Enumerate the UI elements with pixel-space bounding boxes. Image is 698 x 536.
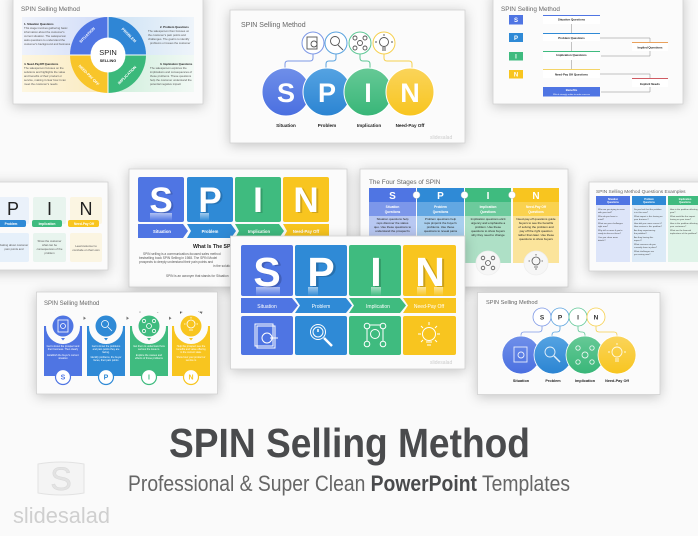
large icon circles <box>502 336 636 374</box>
letters S P I N: P <box>318 78 336 108</box>
slide: SPIN wheel, top left <box>13 0 203 104</box>
chevron labels: Problem <box>312 304 330 310</box>
labels: Need-Pay Off <box>605 379 630 383</box>
card text: Establish the buyer's current <box>47 354 79 357</box>
quadrant text: problems or issues the customer <box>150 41 190 45</box>
tile letters: I <box>253 181 263 220</box>
column text: currently have in place? <box>634 246 658 249</box>
column text: the problem? <box>634 232 648 235</box>
tile letter reflections <box>256 287 443 296</box>
slide heading: SPIN Selling Method Questions Examples <box>596 189 686 195</box>
column text: impact? <box>634 239 642 242</box>
column bodies <box>596 205 698 262</box>
column text: questions to show buyers <box>471 229 505 233</box>
column text: implications of the problem? <box>670 232 698 235</box>
card text: facing. <box>102 351 110 354</box>
SPIN wheel: SPIN <box>99 48 117 57</box>
column text: buyers to see the benefits <box>519 221 554 225</box>
card text: service is <box>186 359 197 362</box>
slide: question flow, top right <box>493 0 683 104</box>
column subheaders: Need-Pay Off <box>526 205 547 209</box>
question boxes <box>543 15 600 96</box>
column labels: Need-Pay Off <box>74 222 95 226</box>
column labels: Situation <box>55 311 71 315</box>
quadrant text: service, making it clear how it can <box>24 78 66 82</box>
quadrant text: those problems. These questions <box>150 74 192 78</box>
column text: Lead customer to <box>75 244 97 248</box>
quadrant text: current situation. The salesperson <box>24 34 67 38</box>
tile letter shadows: S <box>151 182 175 221</box>
column text: Why tell us more if you're <box>598 229 623 232</box>
column text: your business? <box>634 218 649 221</box>
column bodies <box>369 216 559 263</box>
SPIN wheel: PROBLEM <box>121 27 137 43</box>
badge letters: N <box>188 374 194 382</box>
column headers: Situation <box>608 198 619 201</box>
column text: Who do you have in <box>598 216 618 218</box>
column headers: Questions <box>643 201 656 204</box>
quadrant text: The salesperson explores the <box>150 66 187 70</box>
column text: conclude on their own <box>72 248 100 252</box>
slide: letter cards, far left <box>0 182 108 270</box>
letter badges <box>56 370 198 384</box>
card text: situation <box>58 357 68 360</box>
column text: How serious is this problem? <box>634 225 663 228</box>
question boxes: Need-Pay Off Questions <box>555 72 588 76</box>
chevron arrows: Situation <box>153 229 171 234</box>
letters S P I N: S <box>277 78 295 108</box>
tile letter shadows: P <box>310 250 337 296</box>
column text: what can be <box>42 243 57 247</box>
chevron arrows: Implication <box>248 229 270 234</box>
tile letters: I <box>370 249 382 295</box>
logo wordmark: slidesalad <box>13 503 110 528</box>
column text: with your tool? <box>598 211 613 214</box>
column headers: N <box>532 191 540 202</box>
column headers: Questions <box>607 201 620 204</box>
letters: P <box>558 314 563 322</box>
question boxes: Problem Questions <box>558 36 585 40</box>
letter tiles <box>241 245 456 296</box>
slide heading: The Four Stages of SPIN <box>369 179 441 186</box>
letters: I <box>577 314 579 322</box>
SPIN wheel: IMPLICATION <box>117 65 138 85</box>
column text: mind? <box>598 219 605 221</box>
column text <box>374 217 556 241</box>
card text: and pain points they are <box>93 348 120 351</box>
body text: bestselling book SPIN Selling in 1988. The SPIN Model <box>139 256 217 260</box>
quadrant text <box>24 22 193 86</box>
icon tiles <box>241 316 456 355</box>
slide heading: SPIN Selling Method <box>21 6 80 13</box>
tile letter shadows: S <box>256 250 283 296</box>
body heading: What Is The SPIN <box>193 244 236 250</box>
tile letter shadows: N <box>417 250 447 296</box>
column text <box>0 239 100 255</box>
column text: reps pinpoint the buyer's <box>424 221 457 225</box>
tile letter shadows: I <box>372 250 384 296</box>
column labels: Implication <box>39 222 55 226</box>
letter tiles: N <box>514 72 518 78</box>
body text: in the solution <box>213 264 233 268</box>
side boxes: Explicit Needs <box>640 82 660 86</box>
column text: right now? <box>598 225 609 228</box>
column text: What challenges are <box>634 250 655 253</box>
column subheaders: Questions <box>433 210 449 214</box>
column letters: I <box>47 199 52 219</box>
column labels: Need-Pay Off <box>180 311 203 315</box>
labels <box>513 379 630 383</box>
column tints <box>0 197 102 262</box>
column headers: P <box>437 191 444 202</box>
body text: prospects to deeply understand their pain points and <box>139 260 213 264</box>
column text: details? <box>598 239 606 242</box>
column text: of solving the problem and <box>518 225 554 229</box>
chevron arrows <box>138 224 329 238</box>
labels: Need-Pay Off <box>396 123 425 128</box>
logo mark: S <box>50 461 72 497</box>
slide heading: SPIN Selling Method <box>241 22 306 29</box>
column text: problem <box>44 251 55 255</box>
column letters <box>7 199 92 219</box>
column subheaders: Problem <box>434 205 447 209</box>
icon glyphs <box>307 34 393 50</box>
labels <box>276 123 425 128</box>
column subheaders: Implication <box>480 205 496 209</box>
column text: questions to reveal pains <box>424 229 458 233</box>
connectors <box>285 54 412 69</box>
chevron arrows: Need-Pay Off <box>293 229 320 234</box>
column text: What are the financial <box>670 229 692 232</box>
column headers: S <box>389 191 396 202</box>
letter circles <box>533 308 605 326</box>
column text: Asking about customer <box>0 243 28 247</box>
card text: Get to know the problems <box>92 345 121 348</box>
quadrant text: meet the customer's needs <box>24 82 58 86</box>
slide heading: SPIN Selling Method <box>486 300 538 306</box>
chevron labels: Situation <box>257 304 277 310</box>
column headers <box>369 188 559 202</box>
icon: light bulb <box>418 322 440 345</box>
letters: S <box>540 314 545 322</box>
column letters: P <box>7 199 19 219</box>
column subheaders <box>369 202 559 216</box>
column text: What would be the impact <box>670 215 696 218</box>
body text: SPIN selling is a communication-focused sales method <box>143 252 221 256</box>
column text: reps discover the status <box>377 221 409 225</box>
body text: SPIN is an acronym that stands for Situation <box>166 274 229 278</box>
quadrant text: The salesperson then focuses on <box>148 29 190 33</box>
badge letters: I <box>148 374 150 382</box>
column labels <box>55 311 203 315</box>
tile letters: S <box>149 181 173 220</box>
card bodies <box>44 326 210 376</box>
icon glyphs <box>481 254 543 270</box>
card text: serious the issue is. <box>138 348 160 351</box>
column text: you seeing now? <box>634 254 651 256</box>
quadrant text: information about the customer's <box>24 30 65 34</box>
column text: your customers? <box>670 225 687 228</box>
tile letter shadows: N <box>295 182 321 221</box>
icon circles <box>52 316 202 336</box>
column text: consequences of the <box>37 247 63 251</box>
column text: How did you come across it? <box>634 222 663 225</box>
tile letter shadows: P <box>200 182 224 221</box>
quadrant text: challenges. The goal is to identify <box>148 37 190 41</box>
column text: What concerns do you <box>634 243 657 246</box>
column text: problems. Use these <box>427 225 455 229</box>
icon: magnifier <box>310 324 332 346</box>
letters S P I N <box>277 78 420 108</box>
letters S P I N: N <box>400 78 420 108</box>
tile letters: N <box>293 181 319 220</box>
column text: questions to show buyers <box>519 237 553 241</box>
column text: Are they having this <box>634 236 654 239</box>
chevron labels <box>241 298 456 313</box>
column headers: Implication <box>679 198 692 201</box>
SPIN wheel: SELLING <box>100 59 116 63</box>
SPIN wheel: SITUATION <box>79 27 96 44</box>
brand mark: slidesalad <box>430 360 452 366</box>
slide: SPIN circles with icons, bottom right <box>478 292 660 394</box>
card text: Get to know the prospect and <box>47 345 80 348</box>
letter tiles <box>509 15 523 78</box>
tile letter shadows <box>151 182 321 221</box>
tile letters: N <box>415 249 445 295</box>
tile letter reflections <box>150 213 209 221</box>
arrow connectors <box>413 192 516 198</box>
letters S P I N: I <box>364 78 372 108</box>
quadrant text: asks questions to understand the <box>24 38 65 42</box>
quadrant text: the customer's pain points and <box>148 33 186 37</box>
labels: Problem <box>318 123 336 128</box>
column text <box>598 208 698 256</box>
slide: SPIN circles, top center <box>230 10 465 143</box>
icon: process gears <box>364 323 386 347</box>
column headers: Problem <box>644 198 654 201</box>
column subheaders: Questions <box>385 210 401 214</box>
labels: Situation <box>513 379 530 383</box>
column headers: Questions <box>679 201 692 204</box>
slide heading: SPIN Selling Method <box>501 6 560 13</box>
column labels: Implication <box>140 311 158 315</box>
column text: Situation questions help <box>377 217 409 221</box>
card text: faces, their pain points <box>93 359 119 362</box>
card text <box>47 345 206 362</box>
quadrant text: 3. Implication Questions <box>160 62 193 66</box>
column text: pay off the right question <box>520 229 553 233</box>
letter tiles: I <box>515 54 517 60</box>
connectors <box>521 326 617 337</box>
column text: having on your team? <box>670 218 692 221</box>
icon glyphs <box>58 317 198 333</box>
column subheaders: Situation <box>386 205 399 209</box>
pointer triangles <box>61 338 193 340</box>
quadrant text: 1. Situation Questions <box>24 22 54 26</box>
column text: What impact is this having on <box>634 215 663 218</box>
slide: SPIN hero tiles, center <box>230 236 465 369</box>
card text: Identify problems, the buyer <box>91 356 122 359</box>
column text: pain points and <box>5 247 24 251</box>
column text: is in this area? <box>634 211 649 214</box>
labels: Problem <box>545 379 561 383</box>
column text: problem. Use these <box>475 225 501 229</box>
quadrant text: solutions and highlights the value <box>24 70 66 74</box>
tile letters <box>149 181 319 220</box>
column text: What are your challenges <box>598 222 624 225</box>
column headers <box>596 196 698 205</box>
tile letters <box>253 249 445 295</box>
slide: four cards, bottom left <box>36 292 218 394</box>
quadrant text: implications and consequences of <box>150 70 192 74</box>
SPIN wheel: NEED-PAY OFF <box>78 64 100 87</box>
card text: in the current state. <box>180 351 202 354</box>
column labels: Problem <box>5 222 18 226</box>
card text: Show how your product or <box>176 356 206 359</box>
column text: Implication questions elicit <box>471 217 506 221</box>
column text: Show the customer <box>38 239 62 243</box>
column text: quo. Use these questions to <box>374 225 411 229</box>
column labels: Problem <box>99 311 113 315</box>
white arcs <box>46 310 208 344</box>
letter tiles: S <box>514 18 518 24</box>
tile letter shadows: I <box>255 182 265 221</box>
column text: ready to discuss these? <box>598 232 622 235</box>
column text: How is the problem affecting <box>670 208 698 211</box>
card text: Explore the causes and <box>136 354 163 357</box>
slide: question examples, far right <box>589 182 698 271</box>
quadrant text: customer's background and business <box>24 42 71 46</box>
column text: Do you feel that the problem <box>634 208 662 211</box>
logo: slidesalad <box>13 461 110 528</box>
question boxes: Which strongly relate to order success <box>553 93 591 96</box>
column labels <box>0 220 99 227</box>
column text: your? <box>670 211 676 214</box>
column text: why they need to change <box>471 233 505 237</box>
card text: their business. Then clearly <box>48 348 79 351</box>
letter tiles <box>138 177 329 222</box>
quadrant text: 4. Need-PayOff Questions <box>24 62 59 66</box>
card text: effects of those problems <box>135 357 164 360</box>
chevron labels: Implication <box>366 304 390 310</box>
question boxes: Situation Questions <box>558 18 586 22</box>
column text: Are they experiencing <box>634 229 656 232</box>
quadrant text: and benefits of their product or <box>24 74 62 78</box>
column text: How is the problem affecting <box>670 222 698 225</box>
brand mark: slidesalad <box>430 135 452 141</box>
column text: Problem questions help <box>425 217 457 221</box>
badge letters <box>61 374 194 382</box>
column text: Need-pay-off questions guide <box>516 217 556 221</box>
tile letters: P <box>198 181 222 220</box>
SPIN wheel <box>70 17 146 93</box>
labels: Implication <box>357 123 381 128</box>
main title: SPIN Selling Method <box>169 420 530 466</box>
column text: Can you share more <box>598 236 619 239</box>
tile letter shadows <box>256 250 447 296</box>
icon glyphs <box>514 343 626 364</box>
quadrant text: potential negative impact <box>150 82 181 86</box>
side boxes <box>632 42 668 87</box>
chevron labels: Need-Pay Off <box>414 304 445 310</box>
column text: rather than later. Use these <box>518 233 554 237</box>
slide heading: SPIN Selling Method <box>44 301 99 307</box>
quadrant text: 2. Problem Questions <box>160 25 189 29</box>
badge letters: S <box>61 374 66 382</box>
labels: Implication <box>575 379 596 383</box>
flow arrows <box>572 24 650 92</box>
letters <box>540 314 599 322</box>
slide: What is SPIN, middle left <box>129 169 347 287</box>
letter tiles: P <box>514 36 518 42</box>
badge letters: P <box>104 374 109 382</box>
column text: Who are you trying to serve <box>598 208 626 211</box>
column headers: I <box>487 191 490 202</box>
subtitle: Professional & Super Clean PowerPoint Templates <box>128 471 570 496</box>
slide: four stages, middle right <box>360 169 568 287</box>
card text: benefits and value offering <box>176 348 206 351</box>
quadrant text: This stage involves gathering basic <box>24 26 68 30</box>
letters: N <box>594 314 599 322</box>
card text: Get them to understand how <box>133 345 165 348</box>
chevron arrows: Problem <box>202 229 219 234</box>
body text <box>139 252 233 278</box>
column subheaders: Questions <box>528 210 544 214</box>
labels: Situation <box>276 123 296 128</box>
column text: understand the prospect's <box>375 229 410 233</box>
quadrant text: help the customer understand the <box>150 78 192 82</box>
question boxes: Benefits <box>566 88 578 92</box>
large letter circles <box>262 68 434 116</box>
card text: Help the prospect see the <box>177 345 206 348</box>
quadrant backgrounds <box>22 17 194 92</box>
question boxes: Implication Questions <box>556 53 587 57</box>
icon circles <box>476 251 548 275</box>
column text: urgency and emphasize a <box>471 221 506 225</box>
tile letters: P <box>307 249 335 295</box>
column subheaders: Questions <box>480 210 496 214</box>
icon circles <box>302 32 395 54</box>
column letters: N <box>80 199 92 219</box>
side boxes: Implied Questions <box>637 46 663 50</box>
icon: document and gear <box>255 324 278 348</box>
tile letters: S <box>253 249 281 295</box>
quadrant text: The salesperson focuses on the <box>24 66 64 70</box>
step arrows <box>84 316 172 320</box>
